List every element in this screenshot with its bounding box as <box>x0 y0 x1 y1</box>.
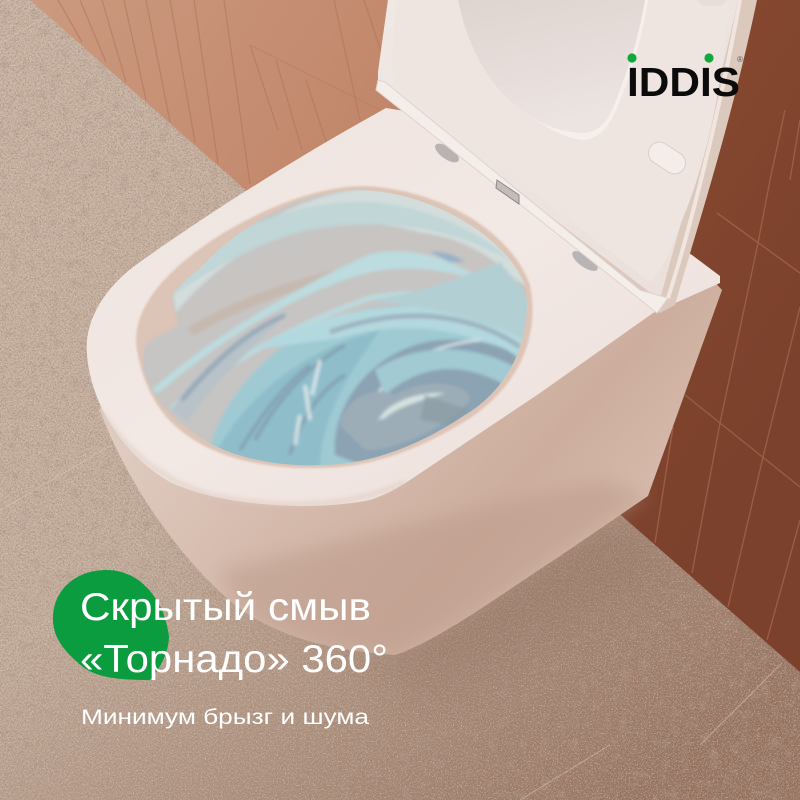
brand logo: IDDIS: IDDIS <box>627 59 740 105</box>
main vortex <box>210 305 474 465</box>
hinge strip <box>376 80 668 313</box>
toilet bowl <box>87 108 722 655</box>
raised toilet seat lid <box>376 0 757 313</box>
headline: Скрытый смыв <box>80 586 371 629</box>
toilet seat chrome fixings <box>432 140 601 275</box>
inner vortex <box>335 340 525 468</box>
centre chrome hinge <box>496 180 519 204</box>
drain <box>340 384 470 450</box>
water swirl <box>143 190 527 466</box>
headline <box>80 586 388 681</box>
rim top surface <box>87 108 720 506</box>
brand logo: IDDIS: ® <box>737 55 743 64</box>
subheading: Минимум брызг и шума <box>81 706 369 729</box>
rim highlight <box>100 410 405 504</box>
seat buffer <box>644 138 690 178</box>
inner panel <box>392 0 728 282</box>
seat opening <box>458 0 648 140</box>
body <box>100 110 722 655</box>
headline: «Торнадо» 360° <box>80 638 388 681</box>
right lid edge highlight <box>668 0 740 298</box>
inner pink wall <box>136 186 533 468</box>
green accent blob <box>53 570 169 680</box>
lid outer edge <box>378 0 757 313</box>
